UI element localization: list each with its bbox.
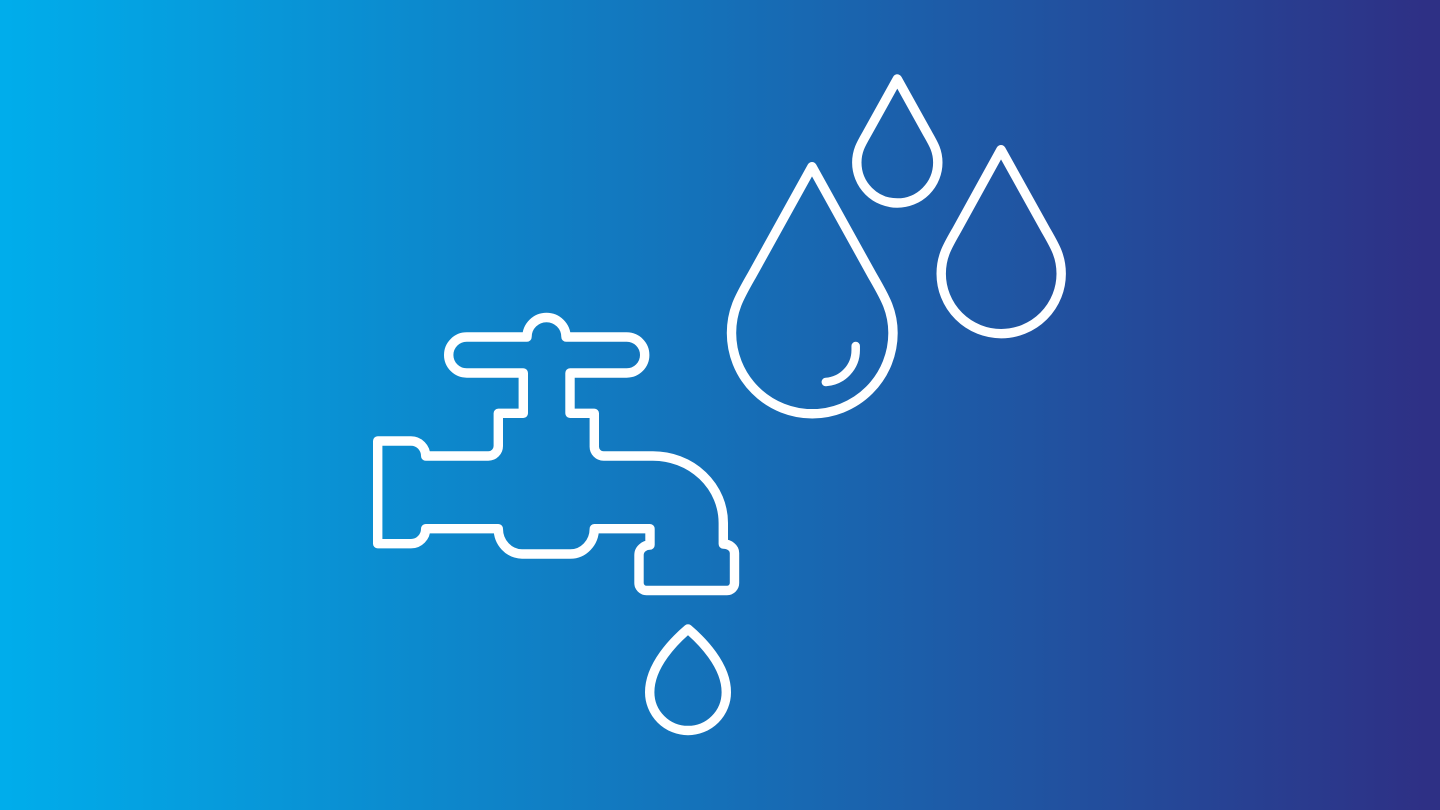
icon: tap	[378, 318, 734, 590]
icon: small drop below tap	[650, 629, 726, 731]
icon: right drop	[941, 150, 1061, 334]
drop highlight	[826, 346, 856, 382]
icon: large drop	[732, 167, 893, 414]
icon: top small drop	[857, 79, 938, 203]
